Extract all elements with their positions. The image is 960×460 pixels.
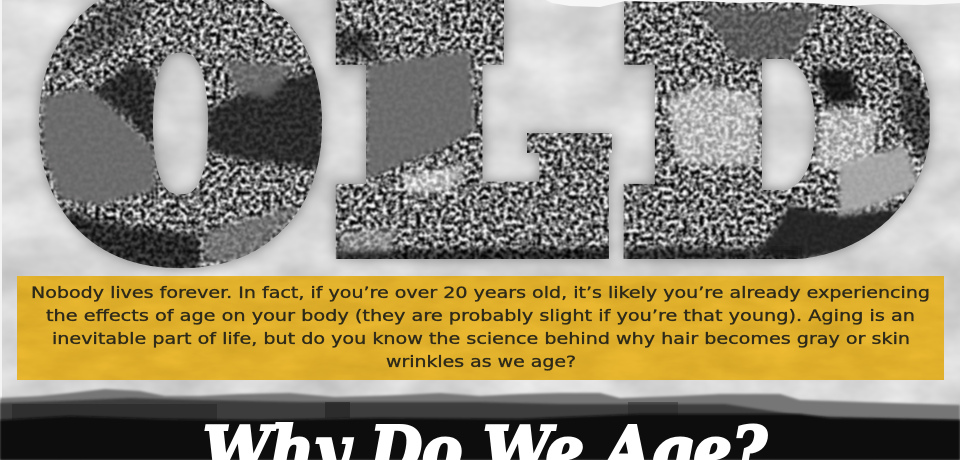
intro text xyxy=(31,283,930,371)
L blotches xyxy=(366,50,475,180)
title word: OLD xyxy=(53,0,921,310)
intro text: inevitable part of life, but do you know the science behind why hair becomes gray or skin xyxy=(52,329,910,348)
yellow intro panel xyxy=(17,276,944,380)
intro text: wrinkles as we age? xyxy=(386,352,576,371)
stone blotches inside OLD xyxy=(42,5,935,270)
torn dark band xyxy=(0,389,960,460)
O blotches xyxy=(42,88,155,205)
intro text: Nobody lives forever. In fact, if you’re over 20 years old, it’s likely you’re already experiencing xyxy=(31,283,930,302)
intro text: the effects of age on your body (they are probably slight if you’re that young). Aging is an xyxy=(46,306,915,325)
torn white top edge xyxy=(546,0,960,7)
D blotches xyxy=(700,8,820,60)
